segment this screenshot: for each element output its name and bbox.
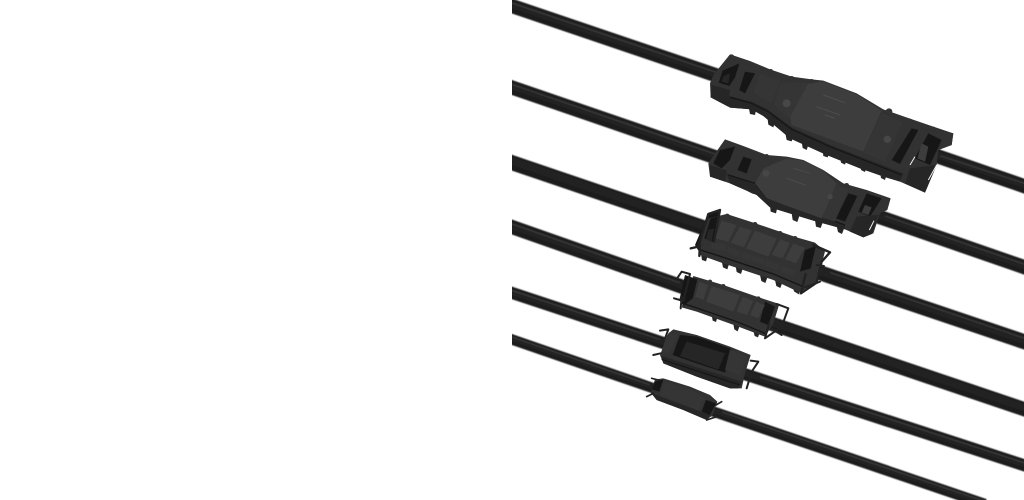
cable 5 [500,286,1024,468]
cable 3 [500,157,1024,345]
bottom ribs [701,253,799,295]
closure 2: medium [708,139,891,237]
bottom ribs [712,315,759,337]
cable 4 [500,220,1024,412]
closure 1: large [710,54,953,193]
left frame backing [695,212,720,253]
bottom ribs [748,105,887,180]
closure 6: smallest housing [647,378,722,420]
bottom ribs [747,183,844,234]
product illustration: cables with joint closures [512,0,1024,500]
closure 4: small open frame [674,272,788,338]
cable 6 [500,333,985,500]
cable 1 [500,0,1024,190]
cable 2 [500,80,1024,271]
closure 3: open frame [691,210,830,295]
closure 5: flat housing [653,329,758,388]
